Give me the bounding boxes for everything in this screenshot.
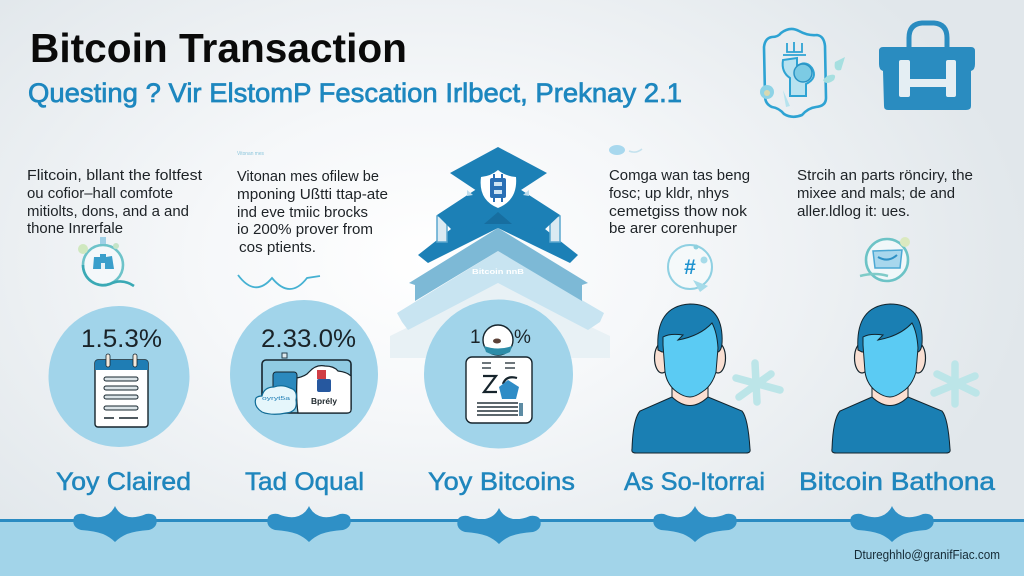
text block: column 3 bbox=[609, 168, 750, 237]
stat value: % bbox=[514, 327, 531, 348]
tier: middle dark roof bbox=[437, 175, 560, 232]
text block: column 3: cemetgiss thow nok bbox=[609, 204, 748, 220]
icon: asterisk 1 bbox=[736, 363, 780, 402]
text block: column 2: cos ptients. bbox=[239, 240, 316, 256]
icon: document with avatar bbox=[466, 325, 532, 423]
text block: column 1: ou cofior–hall comfote bbox=[27, 186, 173, 202]
icon: ring with building bbox=[78, 237, 134, 286]
stat value: 2.33.0% bbox=[261, 325, 356, 353]
text block: column 1: mitiolts, dons, and a and bbox=[27, 204, 189, 220]
icon: wave line bbox=[238, 275, 320, 289]
label: tad oqual: Tad Oqual bbox=[245, 468, 364, 496]
label: yoy bitcoins: Yoy Bitcoins bbox=[428, 468, 575, 496]
ornament 3 bbox=[457, 508, 541, 544]
text block: column 1 bbox=[27, 168, 202, 237]
chart: pyramid of roof tiers bbox=[390, 147, 610, 358]
icon: ring with asterisk bbox=[668, 244, 712, 292]
ornament 2 bbox=[267, 506, 351, 542]
text block: column 1: thone Inrerfale bbox=[27, 221, 123, 237]
tier: lower dark roof bbox=[418, 192, 578, 263]
text block: column 2: ind eve tmiic brocks bbox=[237, 205, 368, 221]
ornament 4 bbox=[653, 506, 737, 542]
text block: column 2: mponing Ußtti ttap-ate bbox=[237, 187, 388, 203]
icon: screen with clouds: Bprély bbox=[311, 397, 338, 406]
stat value bbox=[470, 327, 531, 348]
icon: bitcoin shield bbox=[481, 170, 516, 208]
text block: column 4 bbox=[797, 168, 973, 220]
text block: column 4: mixee and mals; de and bbox=[797, 186, 955, 202]
panel: stat circle 1 bbox=[48, 306, 190, 447]
icon: ring with asterisk: # bbox=[684, 256, 696, 279]
subtitle: Questing ? Vir ElstomP Fescation Irlbect, Preknay 2.1 bbox=[28, 78, 682, 108]
footer band bbox=[0, 506, 1024, 576]
tier caption: Bitcoin nnB bbox=[472, 269, 524, 276]
stat value: 1 bbox=[470, 327, 481, 348]
panel: stat circle 3 bbox=[424, 300, 573, 448]
icon: notepad bbox=[95, 354, 148, 427]
ornament 1 bbox=[73, 506, 157, 542]
text block: column 2 bbox=[237, 151, 388, 256]
contact email: Dtureghhlo@granifFiac.com bbox=[854, 547, 1000, 562]
ornament 5 bbox=[850, 506, 934, 542]
person 1 bbox=[632, 304, 750, 453]
text block: column 4: aller.ldlog it: ues. bbox=[797, 204, 910, 220]
stat value: 1.5.3% bbox=[81, 325, 162, 353]
text block: column 1: Flitcoin, bllant the foltfest bbox=[27, 168, 202, 184]
panel: stat circle 2 bbox=[230, 300, 378, 448]
icon: screen with clouds bbox=[255, 353, 351, 414]
icon: decorative badge bbox=[760, 29, 845, 117]
icon: screen with clouds: oyryt5a bbox=[262, 396, 290, 402]
tier: faint base bbox=[390, 283, 610, 358]
text block: column 2: Vitonan mes ofilew be bbox=[237, 169, 379, 185]
text block: column 2: io 200% prover from bbox=[237, 222, 373, 238]
text block: column 3: fosc; up kldr, nhys bbox=[609, 186, 729, 202]
label: bitcoin bathona: Bitcoin Bathona bbox=[799, 468, 995, 496]
text block: column 3: be arer corenhuper bbox=[609, 221, 737, 237]
text block: column 3: Comga wan tas beng bbox=[609, 168, 750, 184]
label: as so-itorrai: As So-Itorrai bbox=[624, 468, 765, 496]
tier: top dark roof bbox=[450, 147, 547, 205]
icon: asterisk 2 bbox=[934, 364, 976, 404]
label: yoy claired: Yoy Claired bbox=[56, 468, 191, 496]
tier: light roof bbox=[397, 251, 604, 330]
title: Bitcoin Transaction bbox=[30, 25, 407, 71]
icon: briefcase bbox=[879, 23, 975, 110]
tier: medium roof bbox=[409, 228, 588, 301]
icon: blob accent bbox=[609, 145, 642, 155]
person 2 bbox=[832, 304, 950, 453]
icon: ring with screen bbox=[860, 237, 910, 281]
text block: column 2: Vitonan mes bbox=[237, 151, 264, 157]
text block: column 4: Strcih an parts rönciry, the bbox=[797, 168, 973, 184]
